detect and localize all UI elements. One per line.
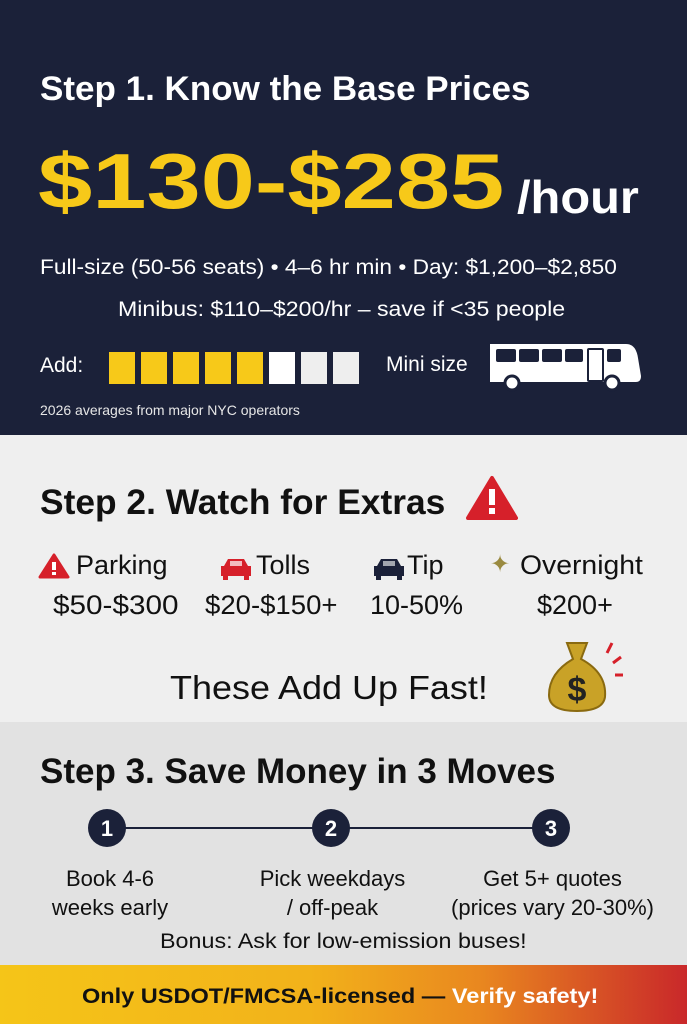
add scale: Add: xyxy=(40,354,83,377)
heading step 1: Step 1. Know the Base Prices xyxy=(40,70,530,108)
step texts: Pick weekdays xyxy=(260,866,405,891)
item overnight: $200+ xyxy=(537,590,613,620)
step texts xyxy=(52,866,654,920)
timeline: 1 xyxy=(101,816,113,841)
step texts: (prices vary 20-30%) xyxy=(451,895,654,920)
per hour: /hour xyxy=(517,171,639,223)
footer banner xyxy=(0,965,687,1024)
icon: warning xyxy=(466,476,518,520)
item tolls: Tolls xyxy=(256,550,310,580)
big price: $130-$285 xyxy=(38,137,504,225)
item overnight: ✦ xyxy=(490,551,510,578)
item parking: $50-$300 xyxy=(53,590,179,620)
step texts: / off-peak xyxy=(287,895,378,920)
minibus line: Minibus: $110–$200/hr – save if <35 people xyxy=(118,298,565,321)
item tolls xyxy=(205,550,337,620)
item overnight xyxy=(490,550,643,620)
bonus tip: Bonus: Ask for low-emission buses! xyxy=(160,930,527,953)
item parking: Parking xyxy=(76,550,168,580)
step texts: weeks early xyxy=(52,895,168,920)
item tip xyxy=(370,550,463,620)
panel: step 3 xyxy=(0,722,687,965)
mini size label: Mini size xyxy=(386,353,468,376)
full-size line: Full-size (50-56 seats) • 4–6 hr min • Day: $1,200–$2,850 xyxy=(40,256,617,279)
add scale xyxy=(40,352,359,384)
step texts: Get 5+ quotes xyxy=(483,866,622,891)
timeline xyxy=(88,809,570,847)
item parking xyxy=(38,550,179,620)
panel: step 1 xyxy=(0,0,687,435)
item tip: 10-50% xyxy=(370,590,463,620)
source note: 2026 averages from major NYC operators xyxy=(40,402,300,418)
item tip: Tip xyxy=(407,550,444,580)
icon: bus xyxy=(490,344,641,388)
footer banner: Only USDOT/FMCSA-licensed — Verify safety! xyxy=(82,985,598,1008)
heading step 2: Step 2. Watch for Extras xyxy=(40,483,445,522)
icon: money bag xyxy=(548,642,623,712)
icon: money bag: $ xyxy=(568,671,587,709)
item overnight: Overnight xyxy=(520,550,643,580)
timeline: 3 xyxy=(545,816,557,841)
step texts: Book 4-6 xyxy=(66,866,154,891)
panel: step 2 xyxy=(0,435,687,722)
item tolls: $20-$150+ xyxy=(205,590,337,620)
callout: add up fast: These Add Up Fast! xyxy=(170,669,488,706)
heading step 3: Step 3. Save Money in 3 Moves xyxy=(40,752,555,791)
extras row xyxy=(38,550,643,620)
timeline: 2 xyxy=(325,816,337,841)
